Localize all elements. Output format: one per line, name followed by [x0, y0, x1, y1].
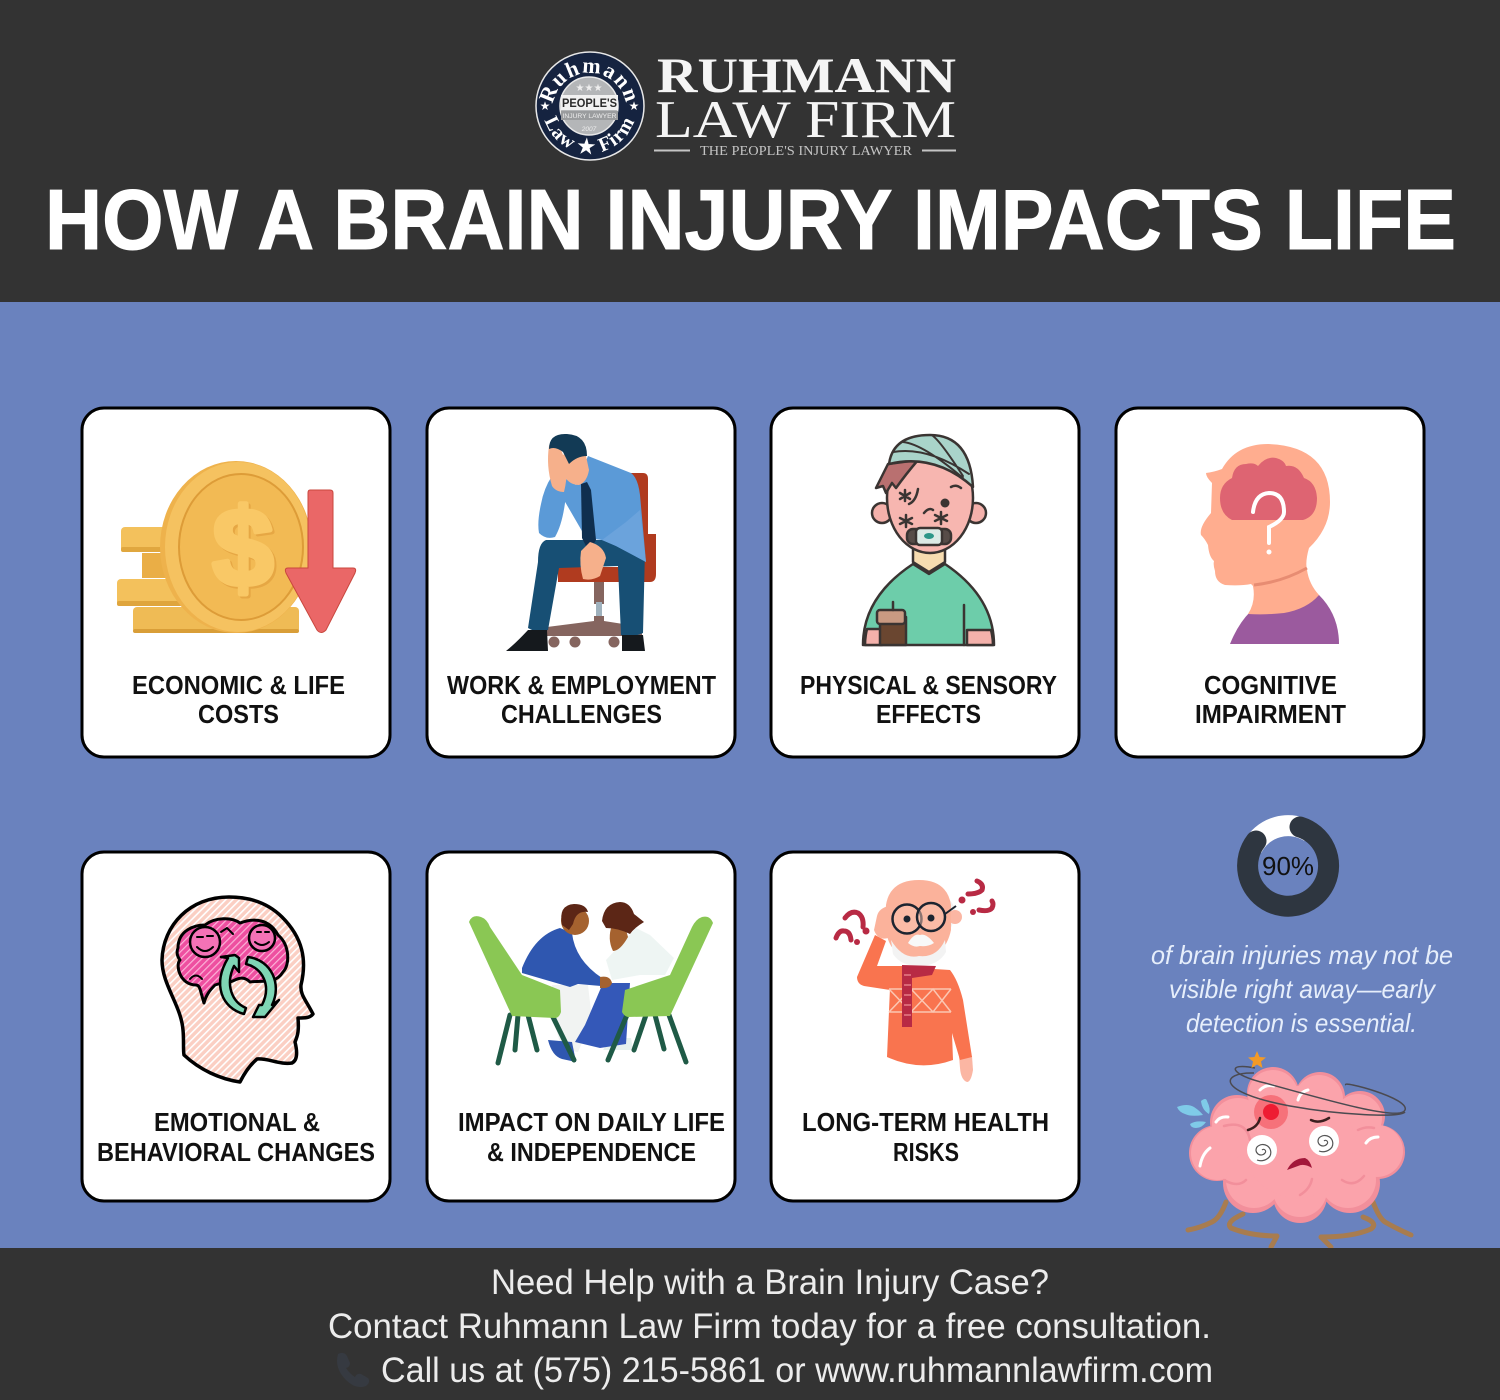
logo wordmark: THE PEOPLE'S INJURY LAWYER — [700, 143, 912, 158]
footer band — [0, 1248, 1500, 1400]
donut chart: 90% — [1248, 826, 1329, 906]
panel: 90 percent statistic — [1151, 826, 1453, 1247]
label: BEHAVIORAL CHANGES — [97, 1137, 375, 1167]
logo seal: Law ★ Firm — [544, 115, 634, 154]
icon: bandaged injured patient — [863, 435, 994, 645]
panel: work and employment challenges — [427, 408, 735, 757]
logo: Ruhmann Law Firm — [535, 47, 956, 161]
label — [132, 670, 345, 729]
footer call to action — [328, 1263, 1213, 1390]
logo seal: INJURY LAWYER — [562, 113, 617, 120]
icon: two people talking in green chairs — [469, 902, 713, 1063]
label — [800, 670, 1057, 729]
stat text: detection is essential. — [1186, 1008, 1417, 1038]
stat text: visible right away—early — [1169, 974, 1437, 1004]
icon: coins with down arrow: $ — [212, 487, 274, 610]
panel: economic and life costs — [82, 408, 390, 757]
header band — [0, 0, 1500, 302]
label — [97, 1107, 375, 1167]
label — [447, 670, 716, 729]
label: LONG-TERM HEALTH — [802, 1107, 1049, 1137]
label: COGNITIVE — [1204, 670, 1337, 700]
footer call to action: Need Help with a Brain Injury Case? — [491, 1263, 1049, 1302]
logo seal: PEOPLE'S — [562, 98, 617, 110]
panel: emotional and behavioral changes — [82, 852, 390, 1201]
icon: coins with down arrow: $ — [214, 489, 276, 612]
label — [802, 1107, 1049, 1167]
icon: head with brain and question mark — [1201, 444, 1339, 644]
logo seal: ★ — [540, 99, 550, 113]
icon: coins with down arrow — [117, 461, 356, 633]
logo seal: Ruhmann — [538, 62, 635, 104]
logo seal: ★ — [629, 99, 639, 113]
label: PHYSICAL & SENSORY — [800, 670, 1057, 700]
icon: confused elderly man — [836, 880, 993, 1082]
label: RISKS — [893, 1137, 959, 1167]
icon: faint phone — [337, 1353, 369, 1387]
footer call to action: Contact Ruhmann Law Firm today for a free consultation. — [328, 1307, 1211, 1346]
icon: stressed man on office chair — [506, 434, 656, 651]
donut chart: 90%: 90% — [1262, 851, 1314, 881]
logo wordmark: RUHMANN — [657, 47, 956, 103]
logo wordmark: LAW FIRM — [655, 91, 956, 149]
label — [458, 1107, 725, 1167]
label: IMPAIRMENT — [1195, 699, 1346, 729]
icon: head with emotions and cycle arrows — [162, 897, 313, 1082]
logo seal — [535, 51, 645, 161]
label: ECONOMIC & LIFE — [132, 670, 345, 700]
stat text: of brain injuries may not be — [1151, 940, 1453, 970]
label: EFFECTS — [876, 699, 981, 729]
label: COSTS — [198, 699, 279, 729]
icon: dizzy cartoon brain — [1177, 1051, 1411, 1247]
label: CHALLENGES — [501, 699, 662, 729]
logo wordmark — [654, 47, 956, 158]
panel: cognitive impairment — [1116, 408, 1424, 757]
stat text — [1151, 940, 1453, 1038]
logo seal: 2007 — [581, 126, 597, 133]
label — [1195, 670, 1346, 729]
panel: physical and sensory effects — [771, 408, 1079, 757]
logo seal: ★★★ — [576, 83, 602, 94]
footer call to action: Call us at (575) 215-5861 or www.ruhmannlawfirm.com — [381, 1351, 1213, 1390]
label: IMPACT ON DAILY LIFE — [458, 1107, 725, 1137]
label: WORK & EMPLOYMENT — [447, 670, 716, 700]
panel: long-term health risks — [771, 852, 1079, 1201]
panel: impact on daily life and independence — [427, 852, 735, 1201]
label: & INDEPENDENCE — [487, 1137, 696, 1167]
label: EMOTIONAL & — [154, 1107, 320, 1137]
